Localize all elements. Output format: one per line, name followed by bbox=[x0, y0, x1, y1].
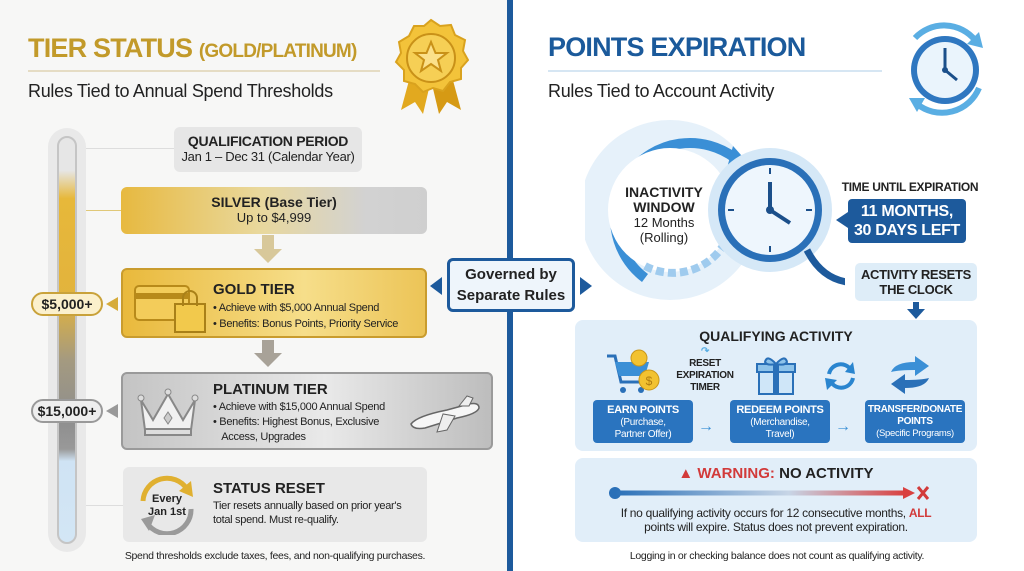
transfer/donate points bbox=[865, 400, 965, 443]
qualifying activity panel: QUALIFYING ACTIVITY bbox=[699, 328, 853, 344]
silver tier box bbox=[121, 187, 427, 234]
warning panel: If no qualifying activity occurs for 12 consecutive months, ALL bbox=[621, 506, 931, 520]
platinum tier box: PLATINUM TIER bbox=[213, 381, 328, 398]
earn points: (Purchase, bbox=[620, 417, 666, 428]
warning panel: ▲ WARNING: NO ACTIVITY bbox=[678, 465, 874, 482]
redeem points: Travel) bbox=[766, 429, 794, 440]
icon: reset arrows bbox=[140, 476, 194, 535]
qualifying activity panel: → bbox=[835, 418, 851, 435]
status reset box: total spend. Must re-qualify. bbox=[213, 514, 339, 526]
arrow down 1 bbox=[262, 235, 274, 250]
inactivity window text bbox=[625, 184, 703, 245]
gold tier box: • Achieve with $5,000 Annual Spend bbox=[213, 302, 379, 314]
platinum tier box: Access, Upgrades bbox=[221, 431, 306, 443]
gold tier box: GOLD TIER bbox=[213, 281, 295, 298]
qualification period box bbox=[174, 127, 362, 172]
qualifying activity panel: → bbox=[698, 418, 714, 435]
timeline bar bbox=[609, 486, 930, 500]
redeem points: REDEEM POINTS bbox=[736, 404, 824, 416]
transfer/donate points: POINTS bbox=[897, 416, 933, 427]
subtitle right: Rules Tied to Account Activity bbox=[548, 81, 774, 101]
icon: gift bbox=[756, 357, 796, 395]
icon: clock with arrows bbox=[909, 22, 983, 116]
reset expiration timer label: EXPIRATION bbox=[676, 370, 734, 381]
icon: refresh bbox=[825, 362, 855, 390]
transfer/donate points: TRANSFER/DONATE bbox=[868, 404, 962, 415]
platinum tier box bbox=[121, 372, 493, 450]
badge: $5,000+ bbox=[31, 292, 103, 316]
earn points bbox=[593, 400, 693, 443]
arrow down 2 bbox=[262, 340, 274, 354]
inactivity window text: 12 Months bbox=[634, 215, 694, 230]
left background bbox=[0, 0, 508, 571]
reset expiration timer label: RESET bbox=[689, 358, 721, 369]
activity resets the clock: ACTIVITY RESETS bbox=[861, 267, 971, 282]
icon: cart with coins: $ bbox=[646, 374, 653, 388]
platinum tier box: • Achieve with $15,000 Annual Spend bbox=[213, 401, 385, 413]
icon: card and bag bbox=[134, 285, 206, 333]
inactivity window text: (Rolling) bbox=[640, 230, 688, 245]
platinum tier box: • Benefits: Highest Bonus, Exclusive bbox=[213, 416, 379, 428]
gold tier box: • Benefits: Bonus Points, Priority Service bbox=[213, 318, 398, 330]
transfer/donate points: (Specific Programs) bbox=[876, 428, 954, 439]
icon: gold medal bbox=[394, 18, 469, 114]
connector lines bbox=[86, 148, 174, 149]
badge: $15,000+ bbox=[31, 399, 103, 423]
icon: reset arrows: Jan 1st bbox=[148, 506, 186, 518]
warning panel: points will expire. Status does not prevent expiration. bbox=[644, 520, 908, 534]
governed by separate rules callout: Governed by bbox=[465, 266, 557, 283]
activity resets the clock: THE CLOCK bbox=[879, 282, 953, 297]
qualification period box: QUALIFICATION PERIOD bbox=[188, 133, 348, 149]
inactivity window ring and clock bbox=[585, 120, 845, 300]
redeem points: (Merchandise, bbox=[750, 417, 810, 428]
badge: $15,000+: $15,000+ bbox=[38, 403, 96, 419]
qualifying activity panel bbox=[575, 320, 977, 451]
inactivity window text: WINDOW bbox=[633, 199, 695, 215]
reset expiration timer label: TIMER bbox=[690, 382, 720, 393]
governed by separate rules callout: Separate Rules bbox=[457, 287, 565, 304]
redeem points bbox=[730, 400, 830, 443]
activity resets the clock bbox=[855, 263, 977, 301]
text: 11 MONTHS, bbox=[861, 203, 953, 220]
icon: transfer arrows bbox=[891, 356, 929, 394]
badge: $5,000+: $5,000+ bbox=[42, 296, 92, 312]
title: tier status: TIER STATUS (GOLD/PLATINUM) bbox=[28, 33, 356, 63]
reset expiration timer label: ↷ bbox=[701, 346, 709, 357]
spend progress bar bbox=[48, 128, 86, 552]
icon: reset arrows: Every bbox=[152, 493, 183, 505]
governed by separate rules callout bbox=[430, 258, 592, 312]
qualification period box: Jan 1 – Dec 31 (Calendar Year) bbox=[181, 149, 355, 164]
divider bbox=[507, 0, 513, 571]
subtitle left: Rules Tied to Annual Spend Thresholds bbox=[28, 81, 333, 101]
inactivity window text: INACTIVITY bbox=[625, 184, 703, 200]
warning panel bbox=[575, 458, 977, 542]
gold tier box bbox=[121, 268, 427, 338]
icon: airplane bbox=[410, 395, 480, 433]
footnote right: Logging in or checking balance does not count as qualifying activity. bbox=[630, 550, 924, 562]
status reset box: STATUS RESET bbox=[213, 480, 325, 497]
silver tier box: Up to $4,999 bbox=[237, 210, 311, 225]
icon: crown bbox=[138, 388, 198, 436]
status reset box: Tier resets annually based on prior year's bbox=[213, 500, 401, 512]
icon: cart with coins bbox=[607, 350, 660, 393]
silver tier box: SILVER (Base Tier) bbox=[211, 194, 337, 210]
title: points expiration: POINTS EXPIRATION bbox=[548, 32, 805, 62]
footnote left: Spend thresholds exclude taxes, fees, and non-qualifying purchases. bbox=[125, 550, 425, 562]
time until expiration: TIME UNTIL EXPIRATION bbox=[842, 180, 978, 194]
earn points: Partner Offer) bbox=[615, 429, 671, 440]
reset expiration timer label bbox=[676, 346, 734, 393]
status reset box bbox=[123, 467, 427, 542]
text: 30 DAYS LEFT bbox=[854, 222, 960, 239]
earn points: EARN POINTS bbox=[607, 404, 679, 416]
